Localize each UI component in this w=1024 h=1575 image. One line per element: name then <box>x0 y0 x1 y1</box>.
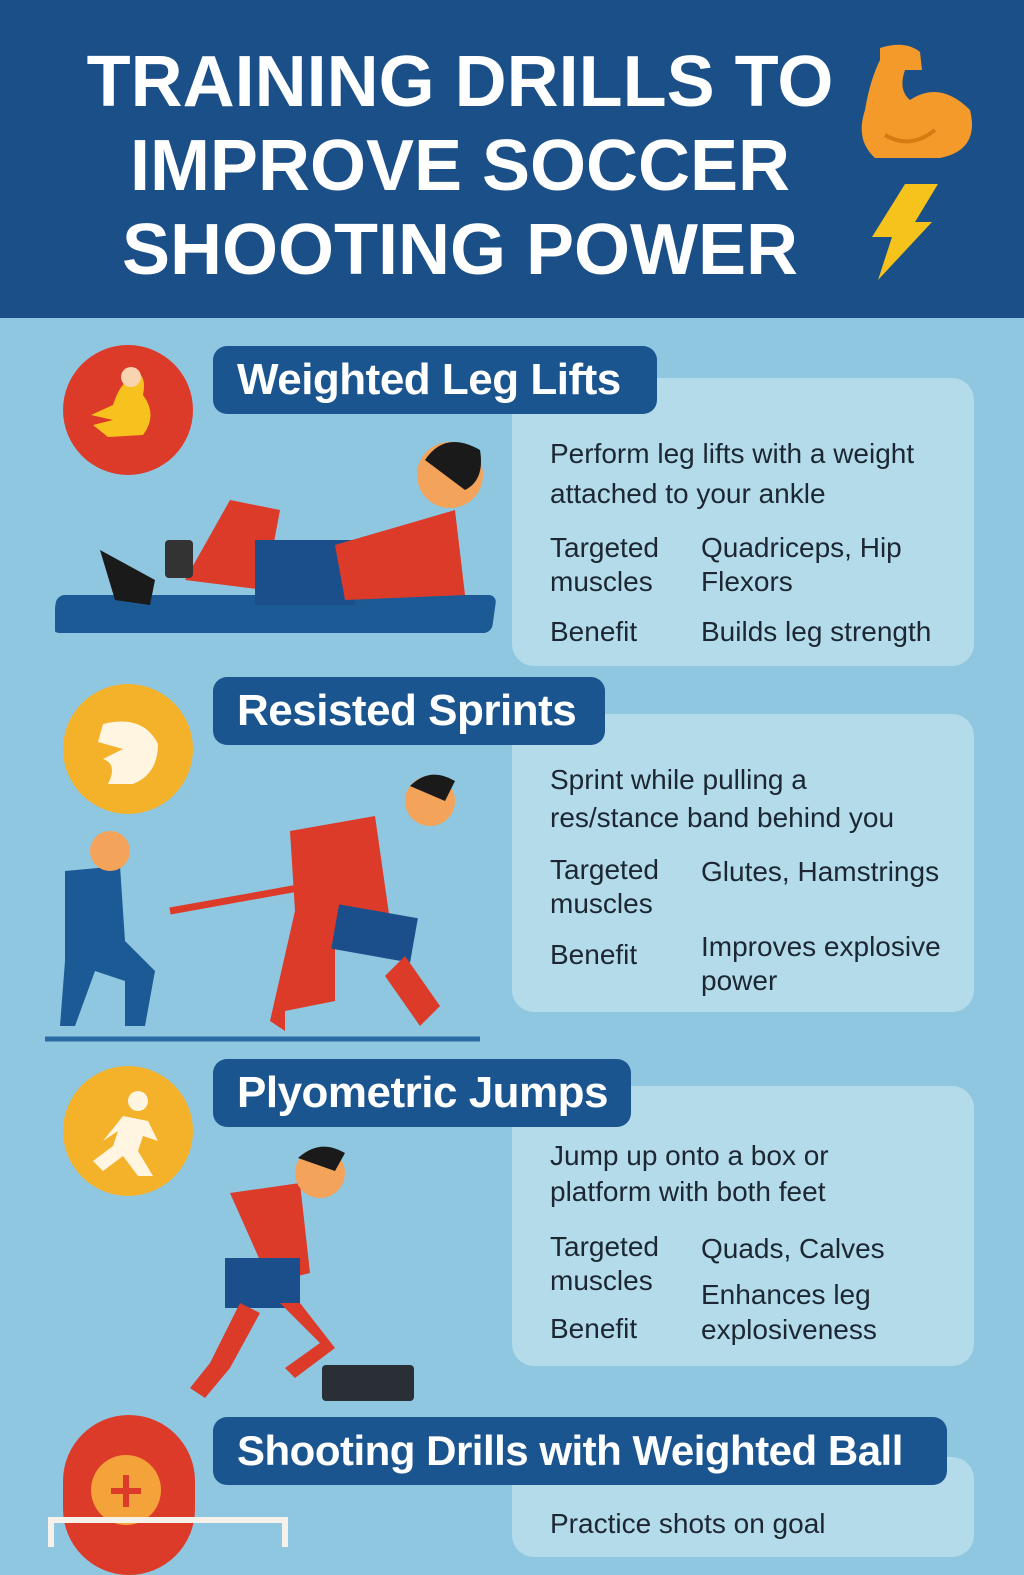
card <box>512 714 974 1012</box>
card: muscles <box>550 1265 653 1296</box>
card: Quadriceps, Hip <box>701 532 902 563</box>
card: Jump up onto a box or <box>550 1140 829 1171</box>
card: res/stance band behind you <box>550 802 894 833</box>
illustration: sprinter with resistance band <box>45 774 480 1042</box>
card: Flexors <box>701 566 793 597</box>
header banner <box>0 0 1024 318</box>
title: IMPROVE SOCCER <box>130 126 790 206</box>
heading pill: Weighted Leg Lifts <box>237 355 621 404</box>
icon circle: ball target <box>63 1415 195 1575</box>
section 1: weighted leg lifts <box>55 345 974 666</box>
icon: lightning bolt <box>872 184 938 280</box>
icon circle: arm <box>63 345 193 475</box>
card: Sprint while pulling a <box>550 764 807 795</box>
title: TRAINING DRILLS TO <box>87 42 833 122</box>
section 4: shooting drills with weighted ball <box>48 1415 974 1575</box>
card: Benefit <box>550 616 637 647</box>
card: muscles <box>550 888 653 919</box>
heading pill <box>213 1417 947 1485</box>
card <box>512 1457 974 1557</box>
card: Targeted <box>550 854 659 885</box>
heading pill: Shooting Drills with Weighted Ball <box>237 1427 903 1474</box>
icon circle: runner <box>63 1066 193 1196</box>
card: attached to your ankle <box>550 478 826 509</box>
card: Improves explosive <box>701 931 941 962</box>
card: muscles <box>550 566 653 597</box>
heading pill <box>213 1059 631 1127</box>
card: Benefit <box>550 939 637 970</box>
icon: flexed bicep <box>862 44 972 158</box>
card <box>512 378 974 666</box>
card: Targeted <box>550 532 659 563</box>
card: platform with both feet <box>550 1176 825 1207</box>
card: Builds leg strength <box>701 616 931 647</box>
card <box>512 1086 974 1366</box>
illustration: goal edge <box>48 1517 288 1547</box>
card: Glutes, Hamstrings <box>701 856 939 887</box>
card: Practice shots on goal <box>550 1508 826 1539</box>
icon circle: wing foot <box>63 684 193 814</box>
section 3: plyometric jumps <box>63 1059 974 1401</box>
card: Quads, Calves <box>701 1233 885 1264</box>
card: Targeted <box>550 1231 659 1262</box>
card: Enhances leg <box>701 1279 871 1310</box>
illustration: jumping player and box <box>190 1146 414 1401</box>
heading pill <box>213 677 605 745</box>
heading pill: Plyometric Jumps <box>237 1068 608 1117</box>
title <box>87 42 833 290</box>
card: Benefit <box>550 1313 637 1344</box>
card: Perform leg lifts with a weight <box>550 438 914 469</box>
title: SHOOTING POWER <box>122 210 798 290</box>
card: explosiveness <box>701 1314 877 1345</box>
illustration: lying player <box>55 442 496 633</box>
heading pill <box>213 346 657 414</box>
section 2: resisted sprints <box>45 677 974 1042</box>
heading pill: Resisted Sprints <box>237 686 576 735</box>
card: power <box>701 965 777 996</box>
